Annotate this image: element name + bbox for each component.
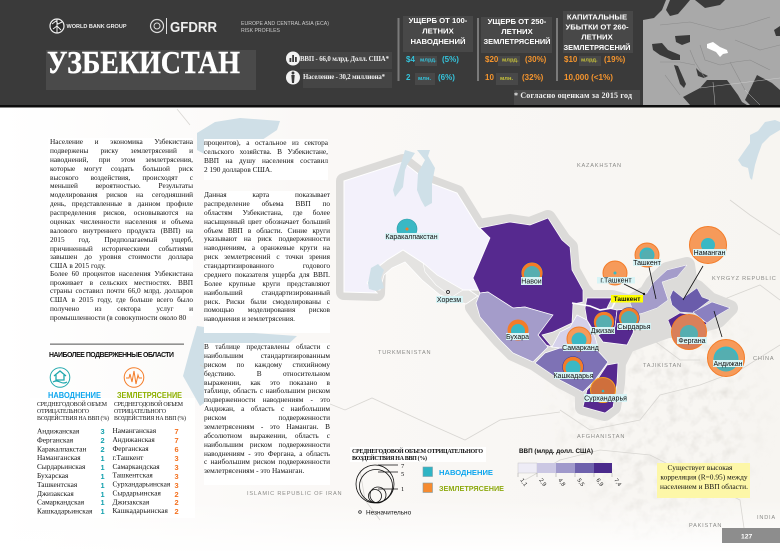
flood column: Ферганская bbox=[37, 436, 74, 444]
earthquake column: 6 bbox=[174, 445, 179, 454]
map halo: Uzbekistan outline bbox=[344, 162, 730, 413]
region: Andijan bbox=[693, 302, 730, 323]
text block: map explanation: Данная карта показывает bbox=[204, 190, 330, 199]
flood column: СРЕДНЕГОДОВОЙ ОБЪЕМ bbox=[37, 400, 108, 408]
region labels: Фергана bbox=[678, 338, 706, 345]
region: Syrdarya bbox=[598, 308, 637, 345]
text: промышленности (в совокупности около 80 bbox=[50, 313, 186, 322]
stat: GDP bbox=[286, 52, 392, 69]
region labels: Ташкент bbox=[633, 260, 662, 267]
earthquake column: Сурхандарьинская bbox=[112, 480, 171, 488]
text block: intro: оценках численности населения и объема bbox=[50, 217, 193, 226]
text block: intro: моделирования рисков на сегодняшний bbox=[50, 190, 193, 199]
white river line bbox=[572, 300, 616, 310]
stat: 250-year earthquake capital loss: ЗЕМЛЕТРЯСЕНИЙ bbox=[564, 43, 631, 52]
earthquake column: 3 bbox=[174, 472, 179, 481]
stat: 100-year flood damage: УЩЕРБ ОТ 100- bbox=[409, 16, 468, 25]
text block: intro: причиненный историческими событиями bbox=[50, 244, 193, 252]
region labels: г.Ташкент bbox=[600, 278, 632, 284]
legend: flood swatch: НАВОДНЕНИЕ bbox=[439, 468, 493, 477]
series label: RISK PROFILES bbox=[241, 28, 281, 34]
earthquake column: 7 bbox=[174, 427, 179, 436]
flood column: ВОЗДЕЙСТВИЯ НА ВВП (%) bbox=[37, 414, 109, 422]
stat: 250-year earthquake capital loss: (19%) bbox=[604, 55, 626, 64]
flood column: 1 bbox=[100, 472, 105, 481]
text block: intro bbox=[48, 138, 193, 316]
flood column: 1 bbox=[100, 463, 105, 472]
earthquake column: Самаркандская bbox=[112, 462, 160, 471]
leader lines bbox=[624, 266, 722, 337]
country labels: KYRGYZ REPUBLIC bbox=[712, 276, 777, 282]
earthquake column: 2 bbox=[174, 507, 179, 516]
stat: 250-year earthquake damage: ЛЕТНИХ bbox=[501, 27, 534, 36]
stat: 100-year flood damage: 2 bbox=[406, 73, 411, 82]
text block: intro: высокого воздействия, происходят с bbox=[50, 172, 193, 182]
text block: intro: страны составил почти 66,0 млрд. долларов bbox=[50, 286, 193, 295]
GFDRR logo: GFDRR bbox=[170, 19, 217, 36]
text block: intro: получено из сектора услуг и bbox=[50, 304, 193, 313]
region: Surkhandarya bbox=[583, 363, 618, 413]
text block: intro: 2015 год. Предполагаемый ущерб, bbox=[50, 235, 193, 244]
text block: GDP per capita: процентов), а остальное из сектора bbox=[204, 138, 328, 147]
text block: map explanation: указывают на риск подверженности bbox=[204, 234, 330, 243]
flood column: Самаркандская bbox=[37, 498, 85, 506]
bubble size legend: 7 bbox=[401, 463, 405, 470]
earthquake column: г.Ташкент bbox=[112, 453, 144, 462]
stat: 250-year earthquake damage: УЩЕРБ ОТ 250- bbox=[488, 17, 547, 26]
text block: intro: меньшей вероятностью. Результаты bbox=[50, 181, 193, 190]
GFDRR logo bbox=[150, 18, 217, 36]
text block: table explanation: В таблице представлены области с bbox=[204, 342, 330, 351]
inner Khorezm cut bbox=[372, 246, 478, 304]
region labels bbox=[385, 233, 743, 402]
correlation callout: корреляция (R=0.95) между bbox=[660, 472, 748, 482]
stat: 250-year earthquake damage: ЗЕМЛЕТРЯСЕНИЙ bbox=[484, 37, 551, 46]
text block: map explanation: Более крупные круги представляют bbox=[204, 279, 330, 288]
hazard circles bbox=[397, 219, 744, 402]
stat: 250-year earthquake capital loss: млрд. bbox=[581, 58, 598, 64]
stat: 100-year flood damage bbox=[406, 16, 468, 82]
GDP legend: ВВП (млрд. долл. США) bbox=[519, 448, 593, 455]
region labels: Кашкадарья bbox=[553, 373, 594, 380]
GDP legend: 5,5 bbox=[575, 478, 585, 488]
water bodies bbox=[183, 118, 780, 406]
stat: 250-year earthquake damage bbox=[484, 17, 551, 82]
text block: table explanation: наводнениям - это Фергана, а область bbox=[204, 448, 330, 458]
flood column: Джизакская bbox=[37, 489, 74, 498]
stat: 250-year earthquake capital loss: УБЫТКИ ОТ 260- bbox=[565, 22, 629, 32]
flood column: Сырдарьинская bbox=[37, 462, 86, 471]
flood column: 3 bbox=[100, 427, 105, 436]
earthquake column: Сырдарьинская bbox=[112, 488, 161, 498]
stat: 250-year earthquake damage: (30%) bbox=[525, 55, 547, 64]
GDP legend: 2,9 bbox=[537, 478, 547, 488]
flood column: Наманганская bbox=[37, 453, 81, 462]
GDP legend: 6,9 bbox=[594, 478, 604, 488]
region: Samarkand bbox=[552, 315, 598, 350]
text block: table explanation: абсолютном выражении, область с bbox=[204, 431, 330, 440]
text block: table explanation: землетрясениям - это Наманган. bbox=[204, 466, 304, 475]
earthquake column: ЗЕМЛЕТРЯСЕНИЕ bbox=[117, 391, 182, 400]
text block: map explanation: областям Узбекистана, где более bbox=[204, 208, 330, 217]
series label bbox=[241, 21, 329, 34]
region labels: Сырдарья bbox=[617, 324, 651, 331]
bubble legend title: ВОЗДЕЙСТВИЯ НА ВВП (%) bbox=[352, 454, 427, 462]
series label: EUROPE AND CENTRAL ASIA (ECA) bbox=[241, 21, 329, 27]
stat: 250-year earthquake damage: млн. bbox=[500, 76, 513, 82]
text block: table explanation: наибольшим риском подверженности bbox=[204, 440, 330, 449]
capital label: Tashkent: Ташкент bbox=[614, 296, 640, 303]
text block: map explanation: стандартизированного годового bbox=[204, 261, 330, 270]
flood column: Кашкадарьинская bbox=[37, 506, 93, 516]
stat: 100-year flood damage: НАВОДНЕНИЙ bbox=[410, 37, 466, 46]
country labels: PAKISTAN bbox=[689, 523, 722, 529]
text block: map explanation: наводнениям, а оранжевые круги на bbox=[204, 243, 330, 252]
legend: earthquake swatch bbox=[423, 483, 504, 493]
earthquake column: 3 bbox=[174, 454, 179, 463]
earthquake column: 2 bbox=[174, 490, 179, 499]
text block: intro: которые могут создать большой риск bbox=[50, 164, 193, 173]
earthquake column: ОТРИЦАТЕЛЬНОГО bbox=[114, 409, 167, 415]
text block: intro: Население и экономика Узбекистана bbox=[50, 137, 193, 146]
text block: map explanation: риск. Риски были смоделированы с bbox=[204, 296, 330, 306]
heading: НАИБОЛЕЕ ПОДВЕРЖЕННЫЕ ОБЛАСТИ bbox=[49, 352, 174, 359]
region: Khorezm bbox=[423, 263, 463, 297]
region: Jizzakh bbox=[585, 298, 617, 333]
text block: intro: день, представленные в данном профиле bbox=[50, 199, 193, 208]
text block: GDP per capita: ВВП на душу населения составил bbox=[204, 156, 328, 165]
region: Navoi bbox=[473, 218, 583, 347]
region labels: Каракалпакстан bbox=[385, 234, 438, 241]
dividers bbox=[398, 18, 558, 81]
earthquake column: 7 bbox=[174, 436, 179, 445]
flood column: 1 bbox=[100, 454, 105, 463]
stat: 250-year earthquake capital loss: $10 bbox=[564, 55, 578, 64]
bubble legend title: СРЕДНЕГОДОВОЙ ОБЪЕМ ОТРИЦАТЕЛЬНОГО bbox=[352, 447, 483, 455]
text block: table explanation: выражении, как это показано в bbox=[204, 378, 330, 386]
text block: GDP per capita: сельского хозяйства. В Узбекистане, bbox=[204, 147, 328, 156]
region labels: Хорезм bbox=[437, 297, 461, 304]
stat: population: Население - 30,2 миллиона* bbox=[303, 74, 386, 81]
flood column: 1 bbox=[100, 481, 105, 490]
flood column: 1 bbox=[100, 498, 105, 507]
region labels: Наманган bbox=[694, 250, 725, 257]
panel: most exposed regions bbox=[37, 344, 186, 516]
terrain relief texture bbox=[572, 342, 740, 508]
text block: map explanation: наибольший стандартизированный bbox=[204, 288, 330, 297]
earthquake column: 3 bbox=[174, 481, 179, 490]
text block: intro: проживает в сельских местностях. ВВП bbox=[50, 278, 193, 286]
region: Bukhara bbox=[476, 292, 553, 362]
text block: intro: распределения рисков, основываются на bbox=[50, 208, 193, 217]
header boxes bbox=[403, 11, 633, 85]
text block: intro: завышен до уровня стоимости доллара bbox=[50, 252, 193, 261]
text block: GDP per capita bbox=[204, 139, 328, 180]
earthquake column: СРЕДНЕГОДОВОЙ ОБЪЕМ bbox=[114, 400, 184, 408]
country labels: KAZAKHSTAN bbox=[577, 163, 622, 169]
flood column: 2 bbox=[100, 445, 105, 454]
GDP legend: 4,8 bbox=[556, 478, 566, 488]
flood column bbox=[37, 391, 109, 516]
stat: 100-year flood damage: (5%) bbox=[442, 55, 459, 64]
page number bbox=[722, 528, 780, 543]
correlation callout bbox=[657, 463, 750, 498]
text block: table explanation: риском подверженности bbox=[204, 413, 330, 422]
stat: 100-year flood damage: $4 bbox=[406, 55, 415, 64]
bubble legend title bbox=[350, 447, 486, 462]
stat: 250-year earthquake damage: (32%) bbox=[522, 73, 544, 82]
flood column: ОТРИЦАТЕЛЬНОГО bbox=[37, 409, 90, 415]
earthquake column: Ферганская bbox=[112, 444, 149, 453]
region: Fergana bbox=[668, 313, 707, 335]
earthquake column bbox=[112, 391, 186, 516]
stat: GDP: ВВП - 66,0 млрд. Долл. США* bbox=[300, 56, 390, 63]
text block: GDP per capita: 2 190 долларов США. bbox=[204, 165, 272, 174]
region: Kashkadarya bbox=[535, 348, 608, 392]
flood column: 2 bbox=[100, 436, 105, 445]
region labels: Сурхандарья bbox=[584, 396, 627, 402]
flood column: Андижанская bbox=[37, 426, 80, 436]
footnote: * Согласно оценкам за 2015 год bbox=[514, 91, 632, 100]
earthquake column: 3 bbox=[174, 463, 179, 472]
region labels: Бухара bbox=[506, 334, 529, 341]
flood column: 1 bbox=[100, 490, 105, 499]
text block: map explanation: объем ВВП в области. Синие круги bbox=[204, 226, 330, 234]
marker: Tashkent city dot bbox=[643, 293, 645, 295]
text block: map explanation: наводнения и землетрясения. bbox=[204, 314, 295, 323]
flood column: Ташкентская bbox=[37, 480, 78, 489]
country labels: CHINA bbox=[753, 356, 774, 362]
GDP legend bbox=[518, 448, 622, 488]
earthquake column: Джизакская bbox=[112, 498, 150, 506]
text block: table explanation: Андижан, а область с наибольшим bbox=[204, 404, 330, 413]
text block: intro: США в 2015 году, где больше всего было bbox=[50, 295, 193, 304]
locator globe bbox=[643, 0, 780, 105]
flood column: НАВОДНЕНИЕ bbox=[48, 391, 101, 400]
stat: 250-year earthquake capital loss: КАПИТАЛЬНЫЕ bbox=[567, 12, 627, 22]
text block: map explanation: насыщенный цвет обозначает больший bbox=[204, 217, 330, 226]
earthquake column: Ташкентская bbox=[112, 470, 153, 480]
footnote bbox=[514, 90, 640, 105]
text block: intro: наводнений, при этом землетрясения, bbox=[50, 155, 193, 164]
text block: map explanation: распределение объема ВВП по bbox=[204, 199, 330, 208]
country borders bbox=[177, 109, 780, 535]
earthquake column: Кашкадарьинская bbox=[112, 506, 168, 515]
text block: map explanation: риск землетрясений с точки зрения bbox=[204, 252, 330, 261]
stat: 250-year earthquake capital loss: ЛЕТНИХ bbox=[581, 32, 614, 42]
country labels: TURKMENISTAN bbox=[378, 350, 431, 356]
text block: table explanation: риском по каждому стихийному bbox=[204, 360, 330, 369]
flood column: 1 bbox=[100, 507, 105, 516]
region: Tashkent bbox=[630, 265, 687, 315]
earthquake column: ВОЗДЕЙСТВИЯ НА ВВП (%) bbox=[114, 414, 186, 422]
country labels: INDIA bbox=[757, 515, 776, 521]
text block: map explanation bbox=[204, 191, 330, 333]
legend: flood swatch bbox=[423, 467, 493, 477]
stat: 100-year flood damage: млрд. bbox=[420, 58, 437, 64]
stat: 100-year flood damage: (6%) bbox=[438, 73, 455, 82]
earthquake column: Андижанская bbox=[112, 435, 155, 444]
text block: table explanation: таблице, область с наибольшим риском bbox=[204, 386, 330, 395]
header band bbox=[0, 0, 780, 108]
legend: earthquake swatch: ЗЕМЛЕТРЯСЕНИЕ bbox=[439, 484, 504, 493]
text block: map explanation: среднего показателя ущерба для ВВП. bbox=[204, 270, 330, 279]
stat: population bbox=[286, 70, 392, 88]
world bank logo bbox=[50, 19, 127, 33]
bubble size legend: 1 bbox=[401, 486, 404, 493]
region: Karakalpakstan bbox=[344, 162, 490, 293]
earthquake column: Наманганская bbox=[112, 426, 157, 435]
region labels: Андижан bbox=[714, 361, 743, 368]
bubble size legend bbox=[356, 463, 405, 503]
text block: table explanation: наибольшим стандартизированным bbox=[204, 351, 330, 360]
stat: 250-year earthquake damage: млрд. bbox=[502, 58, 519, 64]
bubble size legend: 5 bbox=[401, 471, 404, 478]
country labels: ISLAMIC REPUBLIC OF IRAN bbox=[247, 491, 342, 497]
icon: earthquake bbox=[124, 368, 144, 387]
stat: 100-year flood damage: ЛЕТНИХ bbox=[422, 26, 455, 36]
legend: negligible: Незначительно bbox=[366, 510, 412, 516]
text block: intro: подвержены риску землетрясений и bbox=[50, 146, 193, 155]
flood column: Бухарская bbox=[37, 471, 69, 480]
title: УЗБЕКИСТАН bbox=[47, 44, 240, 80]
country labels: TAJIKISTAN bbox=[643, 363, 682, 369]
stat: 250-year earthquake capital loss bbox=[564, 12, 631, 82]
icon: flood bbox=[50, 368, 70, 387]
text block: intro: валового внутреннего продукта (ВВП) на bbox=[50, 226, 193, 235]
region labels: Джизак bbox=[591, 328, 615, 335]
text block: table explanation: подверженности наводнениям - это bbox=[204, 395, 330, 404]
stat: 250-year earthquake damage: $20 bbox=[485, 55, 499, 64]
correlation callout: населением и ВВП области. bbox=[660, 482, 748, 491]
stat: 250-year earthquake damage: 10 bbox=[485, 73, 494, 82]
text block: table explanation: с наибольшим риском подверженности bbox=[204, 457, 330, 466]
GDP legend: 1,1 bbox=[518, 478, 528, 488]
region labels: Навои bbox=[521, 278, 542, 286]
page number: 127 bbox=[741, 534, 753, 540]
correlation callout: Существует высокая bbox=[668, 463, 733, 472]
country labels bbox=[247, 163, 777, 529]
text block: map explanation: помощью моделирования рисков bbox=[204, 305, 330, 314]
text block: table explanation: землетрясениям - это Наманган. В bbox=[204, 422, 330, 431]
country labels: AFGHANISTAN bbox=[577, 434, 625, 440]
text block: intro: США в 2015 году. bbox=[50, 261, 106, 270]
region labels: Самарканд bbox=[562, 345, 599, 352]
earthquake column: 2 bbox=[174, 498, 179, 507]
Aral Sea bbox=[368, 150, 435, 291]
GDP legend: 7,4 bbox=[612, 478, 622, 488]
text block: table explanation: бедствию. В относительном bbox=[204, 369, 330, 378]
text block: intro: Более 60 процентов населения Узбекистана bbox=[50, 269, 193, 278]
world bank logo: WORLD BANK GROUP bbox=[66, 24, 127, 30]
region: Namangan bbox=[670, 288, 710, 313]
flood column: Каракалпакстан bbox=[37, 444, 87, 454]
stat: 100-year flood damage: млн. bbox=[418, 76, 431, 82]
text block: table explanation bbox=[204, 343, 330, 485]
stat: 250-year earthquake capital loss: 10,000 (<1%) bbox=[564, 73, 613, 82]
